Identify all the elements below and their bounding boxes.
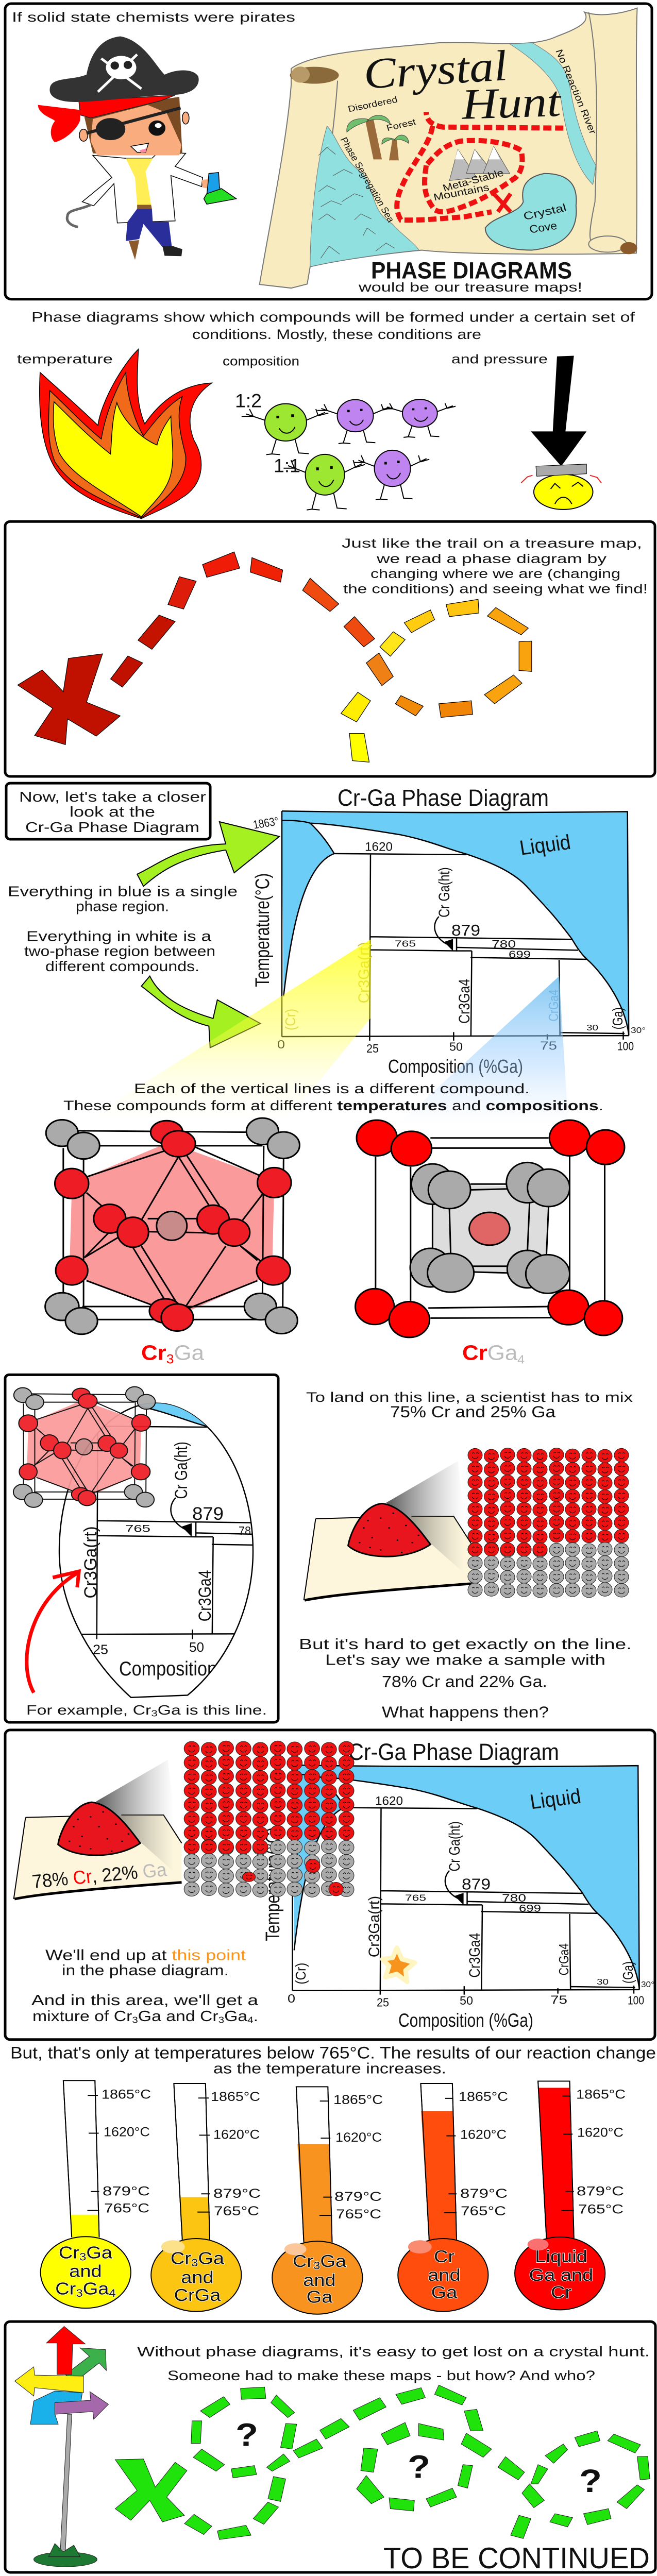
chart: phase diagram with star: 50	[460, 1995, 473, 2008]
text block: treasure map trail explanation: Just like the trail on a treasure map,	[342, 536, 642, 551]
thermometer 2: Cr3Ga and CrGa: 765°C	[214, 2204, 259, 2218]
text block: intro: conditions. Mostly, these conditions are	[192, 327, 481, 342]
label: Cr3Ga: Ga	[174, 1342, 205, 1365]
text block: vertical lines are compounds: These compounds form at different temperatures and compositions .	[63, 1098, 603, 1114]
map labels: Meta-Stable	[441, 167, 505, 194]
icon: mini Cr3Ga crystal	[13, 1387, 155, 1507]
thermometer 1: Cr3Ga and Cr3Ga4: 1620°C	[104, 2125, 150, 2139]
text block: hard to get exactly on the line: What happens then?	[382, 1703, 549, 1721]
map title: Crystal Hunt	[362, 41, 563, 128]
thermometer 3: Cr3Ga and Ga	[272, 2087, 383, 2314]
chart labels: 879	[451, 921, 480, 939]
text block: this point	[31, 1946, 259, 2025]
thermometer 5: Liquid Ga and Cr	[515, 2081, 626, 2310]
thermometer 4: Cr and Ga	[398, 2083, 508, 2312]
icon: pressure arrow on squashed face	[521, 356, 601, 510]
thermometer 4: Cr and Ga: 1865°C	[459, 2090, 508, 2104]
label: ratio 1:2: 1:2	[235, 391, 262, 412]
thermometer 3: Cr3Ga and Ga: 1620°C	[335, 2130, 382, 2145]
text block: treasure map trail explanation: changing where we are (changing	[370, 566, 620, 581]
thermometer 1: Cr3Ga and Cr3Ga4: Ga	[86, 2243, 112, 2262]
chart labels: Cr3Ga4	[455, 979, 473, 1024]
thermometer 4: Cr and Ga: 879°C	[460, 2186, 508, 2200]
text block: below 765C: as the temperature increases.	[213, 2060, 446, 2077]
thermometer 2: Cr3Ga and CrGa: CrGa	[174, 2285, 221, 2304]
chart: phase diagram with star: CrGa4	[557, 1943, 571, 1975]
thermometer 2: Cr3Ga and CrGa: 879°C	[213, 2186, 261, 2200]
chart labels: 699	[509, 949, 531, 960]
text block: below 765C	[10, 2044, 656, 2077]
text block: treasure map trail explanation: the conditions) and seeing what we find!	[343, 581, 648, 596]
icon: flame	[40, 349, 212, 519]
chart: phase diagram with star: 100	[628, 1994, 644, 2007]
label: ratio 1:1: 1:1	[274, 455, 300, 477]
x axis labels	[277, 1039, 634, 1056]
chart labels: Cr Ga(ht)	[435, 867, 452, 918]
question marks: ?	[408, 2449, 430, 2485]
icon: powder mound on paper	[14, 1760, 182, 1900]
text block: white regions: different compounds.	[45, 959, 199, 975]
question marks: ?	[579, 2463, 602, 2499]
panel: to be continued	[5, 2321, 655, 2575]
caption: for example: Ga is this line.	[158, 1702, 267, 1718]
x axis labels: 100	[617, 1040, 634, 1053]
lens: zoomed phase diagram: Cr Ga(ht)	[171, 1442, 191, 1499]
text block: this point: in the phase diagram.	[62, 1962, 229, 1979]
map labels: Cove	[528, 219, 558, 235]
thermometer 1: Cr3Ga and Cr3Ga4: Cr	[59, 2243, 79, 2262]
chart: phase diagram with star: 75	[550, 1994, 567, 2007]
chart: phase diagram with star: 30	[597, 1977, 609, 1986]
crystal structure: Cr3Ga	[45, 1118, 299, 1366]
thermometer 5: Liquid Ga and Cr: Liquid	[535, 2247, 587, 2266]
thermometer 1: Cr3Ga and Cr3Ga4: 4	[109, 2287, 116, 2299]
map labels: Phase Segregation Sea	[338, 135, 397, 224]
text block: hard to get exactly on the line	[299, 1636, 632, 1721]
text block: intro	[31, 310, 635, 342]
chart: phase diagram with star: (Cr)	[292, 1963, 309, 1985]
text block: without phase diagrams: Without phase diagrams, it's easy to get lost on a crystal hunt.	[137, 2344, 650, 2360]
chart plot areas and lines	[282, 811, 629, 1041]
thermometer 3: Cr3Ga and Ga: 879°C	[334, 2190, 382, 2204]
chart labels: 765	[395, 939, 416, 948]
lens: zoomed phase diagram	[59, 1402, 254, 1698]
illustration: powder pile and atom grid 75/25	[304, 1448, 629, 1601]
chart labels: Cr3Ga(rt)	[355, 942, 372, 1003]
thermometer 3: Cr3Ga and Ga: and	[303, 2270, 336, 2290]
thermometer 3: Cr3Ga and Ga: Ga	[320, 2251, 346, 2270]
text block: vertical lines are compounds: Each of the vertical lines is a different compound.	[134, 1081, 530, 1096]
thermometer 5: Liquid Ga and Cr: 1620°C	[577, 2125, 624, 2140]
panel: Cr3Ga line example	[4, 1374, 279, 1724]
lens: zoomed phase diagram: Cr3Ga4	[195, 1570, 214, 1621]
label: CrGa4: 4	[517, 1353, 525, 1366]
question marks	[235, 2417, 602, 2499]
thermometer 3: Cr3Ga and Ga: 765°C	[336, 2207, 381, 2222]
lens: zoomed phase diagram: 879	[192, 1503, 224, 1523]
thermometer 4: Cr and Ga: Cr	[434, 2247, 454, 2266]
panel: pirate and treasure map header	[5, 4, 652, 299]
heading: if solid state chemists were pirates: If solid state chemists were pirates	[12, 9, 295, 25]
x axis title: Composition (%Ga)	[388, 1056, 523, 1077]
thermometer 1: Cr3Ga and Cr3Ga4: and	[69, 2261, 102, 2281]
chart: phase diagram with star: Cr3Ga4	[465, 1933, 483, 1978]
chart labels: 780	[492, 938, 516, 950]
text block: hard to get exactly on the line: Let's say we make a sample with	[325, 1651, 605, 1668]
chart: phase diagram with star: Composition (%Ga)	[398, 2010, 533, 2031]
x axis labels: 75	[540, 1040, 557, 1053]
thermometer 1: Cr3Ga and Cr3Ga4: 765°C	[104, 2201, 149, 2215]
icon: atom grid	[468, 1448, 629, 1598]
map labels: Crystal	[522, 201, 568, 223]
label: Cr3Ga: 3	[166, 1352, 174, 1366]
title: phase diagrams: PHASE DIAGRAMS	[371, 258, 572, 284]
thermometer 5: Liquid Ga and Cr: Ga and	[529, 2265, 593, 2285]
thermometer 2: Cr3Ga and CrGa: 3	[191, 2257, 198, 2269]
thermometer 2: Cr3Ga and CrGa	[151, 2083, 261, 2312]
map title: Crystal Hunt: Crystal	[362, 41, 509, 98]
x axis labels: 25	[366, 1042, 379, 1056]
map labels	[338, 48, 599, 235]
map labels: Disordered	[347, 95, 398, 114]
thermometer 4: Cr and Ga: Ga	[431, 2283, 457, 2302]
label: composition: composition	[223, 353, 299, 368]
chart: phase diagram with star: 879	[462, 1875, 491, 1893]
text block: this point: 4	[247, 2014, 254, 2025]
chart: phase diagram with star: Liquid	[528, 1785, 583, 1814]
text block: without phase diagrams	[137, 2344, 650, 2384]
text block: hard to get exactly on the line: 78% Cr and 22% Ga.	[382, 1673, 547, 1691]
callout: blue highlight wedge to CrGa4	[397, 976, 568, 1125]
arrows: green arrows pointing to diagram	[137, 822, 279, 1048]
label: 78% Cr, 22% Ga: 78% Cr, 22% Ga	[31, 1859, 168, 1892]
callout box: closer look at Cr-Ga diagram: Now, let's take a closer	[19, 789, 206, 805]
thermometer 5: Liquid Ga and Cr: Cr	[551, 2283, 571, 2302]
text block: hard to get exactly on the line: But it's hard to get exactly on the line.	[299, 1636, 632, 1652]
chart labels: Liquid	[518, 831, 572, 860]
icon: atom grid with stray atoms	[184, 1741, 354, 1897]
callout: yellow highlight wedge to Cr3Ga	[89, 940, 370, 1118]
chart: phase diagram with star: Cr-Ga Phase Diagram	[348, 1739, 559, 1765]
caption: for example: 3	[151, 1708, 158, 1718]
crystal structure: CrGa4	[356, 1120, 625, 1366]
text block: this point: Ga	[224, 2008, 248, 2024]
icon: Cr3Ga unit cell	[45, 1118, 299, 1334]
thermometer 4: Cr and Ga: 1620°C	[460, 2127, 507, 2142]
lens: zoomed phase diagram: 25	[93, 1641, 108, 1657]
text block: white regions: Everything in white is a	[26, 928, 211, 944]
text block: intro: Phase diagrams show which compounds will be formed under a certain set of	[31, 310, 635, 325]
chart labels	[252, 815, 646, 1035]
map labels: Mountains	[432, 182, 491, 203]
thermometer 3: Cr3Ga and Ga: Cr	[293, 2251, 313, 2270]
chart: phase diagram with star: Cr Ga(ht)	[445, 1821, 463, 1871]
map labels: Forest	[385, 117, 417, 133]
thermometer 5: Liquid Ga and Cr: 1865°C	[576, 2087, 626, 2102]
callout box: closer look at Cr-Ga diagram: look at the	[70, 804, 155, 820]
thermometer 2: Cr3Ga and CrGa: and	[181, 2268, 214, 2287]
icon: green X and dashed trail	[115, 2385, 650, 2539]
icon: signpost with arrows	[15, 2327, 108, 2567]
thermometer 3: Cr3Ga and Ga: Ga	[307, 2287, 332, 2307]
label: Cr3Ga: Cr	[141, 1342, 166, 1365]
text block: vertical lines are compounds	[63, 1081, 603, 1114]
chart: phase diagram with star: 25	[377, 1996, 389, 2009]
thermometer 3: Cr3Ga and Ga: 1865°C	[333, 2093, 383, 2107]
icon: CrGa4 unit cell	[356, 1120, 625, 1337]
text block: to land on this line: To land on this line, a scientist has to mix	[306, 1390, 633, 1405]
callout box: closer look at Cr-Ga diagram	[6, 783, 210, 839]
text block: white regions	[24, 928, 215, 975]
thermometer 1: Cr3Ga and Cr3Ga4: Ga	[83, 2279, 109, 2298]
text block: blue regions	[8, 884, 238, 914]
chart labels: CrGa4	[547, 989, 561, 1021]
text block: blue regions: phase region.	[76, 899, 169, 914]
lens: zoomed phase diagram: 50	[189, 1639, 204, 1655]
text block: this point: 3	[132, 2014, 138, 2025]
question marks: ?	[235, 2417, 258, 2453]
caption: for example: For example, Cr	[26, 1702, 137, 1718]
arrow: red arrow to Cr3Ga line	[27, 1571, 79, 1692]
label: temperature: temperature	[17, 351, 113, 366]
subtitle: would be our treasure maps: would be our treasure maps!	[358, 280, 582, 294]
section: temperature flame	[17, 349, 212, 519]
panel: trail analogy	[5, 521, 655, 776]
chart labels: (Cr)	[282, 1009, 298, 1030]
label: and pressure: and pressure	[451, 351, 548, 366]
icon: powder mound on paper	[304, 1461, 472, 1601]
text block: this point: We'll end up at this point	[45, 1946, 246, 1963]
panel: off-line sample	[5, 1730, 655, 2040]
chart: phase diagram with star: Cr3Ga(rt)	[365, 1896, 382, 1957]
chart title: Cr-Ga Phase Diagram	[338, 785, 549, 811]
thermometer 1: Cr3Ga and Cr3Ga4: 3	[79, 2251, 86, 2263]
lens: zoomed phase diagram: 765	[125, 1523, 150, 1534]
thermometer 1: Cr3Ga and Cr3Ga4: Cr	[55, 2279, 76, 2298]
thermometer 2: Cr3Ga and CrGa: Cr	[171, 2249, 191, 2268]
thermometer 2: Cr3Ga and CrGa: 1620°C	[213, 2127, 260, 2142]
lens: zoomed phase diagram: Cr3Ga(rt)	[80, 1526, 100, 1599]
thermometer 4: Cr and Ga: and	[428, 2265, 461, 2285]
chart: phase diagram with star: 0	[288, 1992, 295, 2005]
icon: smiling molecules	[242, 399, 456, 510]
illustration: treasure map scroll	[260, 8, 637, 288]
thermometer 1: Cr3Ga and Cr3Ga4: 3	[76, 2287, 83, 2299]
chart: phase diagram with star	[262, 1739, 654, 2031]
chart: phase diagram with star: 780	[502, 1892, 526, 1904]
chart: phase diagram with star: Temperature(°C)	[262, 1827, 284, 1941]
chart: phase diagram with star: 1620	[375, 1794, 403, 1808]
text block: white regions: two-phase region between	[24, 943, 215, 959]
chart: Cr-Ga phase diagram	[251, 785, 646, 1077]
text block: this point: .	[254, 2008, 258, 2024]
chart: phase diagram with star: 765	[405, 1893, 426, 1903]
text block: to land on this line	[306, 1390, 633, 1421]
thermometer 1: Cr3Ga and Cr3Ga4: 879°C	[103, 2184, 150, 2198]
text block: blue regions: Everything in blue is a single	[8, 884, 238, 900]
thermometer 4: Cr and Ga: 765°C	[461, 2204, 506, 2218]
thermometer 5: Liquid Ga and Cr: 879°C	[577, 2184, 624, 2198]
lens: zoomed phase diagram: 78	[239, 1524, 251, 1538]
callout box: closer look at Cr-Ga diagram: Cr-Ga Phase Diagram	[25, 820, 199, 835]
chart labels: 30	[586, 1023, 598, 1032]
thermometer 3: Cr3Ga and Ga: 3	[313, 2260, 320, 2272]
thermometer 2: Cr3Ga and CrGa: Ga	[198, 2249, 224, 2268]
text block: this point: Ga and Cr	[138, 2008, 218, 2024]
icon: pirate chemist	[38, 36, 237, 260]
chart: phase diagram with star: (Ga)	[619, 1961, 636, 1984]
x axis labels: 0	[277, 1039, 285, 1052]
thermometer 2: Cr3Ga and CrGa: 1865°C	[211, 2090, 260, 2104]
chart: phase diagram with star: 30°	[641, 1980, 654, 1989]
text block: treasure map trail explanation: we read a phase diagram by	[376, 551, 607, 566]
chart labels: (Ga)	[609, 1007, 626, 1029]
text block: this point: mixture of Cr	[32, 2008, 130, 2024]
text block: without phase diagrams: Someone had to make these maps - but how? And who?	[167, 2368, 595, 2384]
section: pressure	[451, 351, 601, 510]
text block: treasure map trail explanation	[342, 536, 648, 596]
chart labels: 30°	[631, 1026, 646, 1035]
text block: this point: And in this area, we'll get a	[31, 1992, 259, 2009]
map title: Crystal Hunt: Hunt	[460, 77, 563, 128]
map labels: No Reaction River	[553, 48, 599, 135]
thermometer 1: Cr3Ga and Cr3Ga4	[41, 2080, 151, 2308]
thermometer 1: Cr3Ga and Cr3Ga4: 1865°C	[102, 2087, 151, 2102]
lens: zoomed phase diagram: Composition	[119, 1657, 217, 1680]
y axis title: Temperature(°C)	[251, 873, 274, 987]
chart labels: 1863°	[252, 815, 280, 832]
icon: red X and gradient dashed trail	[18, 552, 532, 762]
chart labels: 1620	[365, 840, 393, 854]
label: CrGa4: CrGa	[462, 1342, 519, 1365]
section: composition molecules	[223, 353, 456, 510]
thermometer 5: Liquid Ga and Cr: 765°C	[578, 2202, 624, 2216]
text block: to land on this line: 75% Cr and 25% Ga	[390, 1403, 555, 1421]
x axis labels: 50	[449, 1041, 463, 1054]
text block: this point: 3	[218, 2014, 224, 2025]
chart: phase diagram with star: 699	[519, 1903, 541, 1914]
